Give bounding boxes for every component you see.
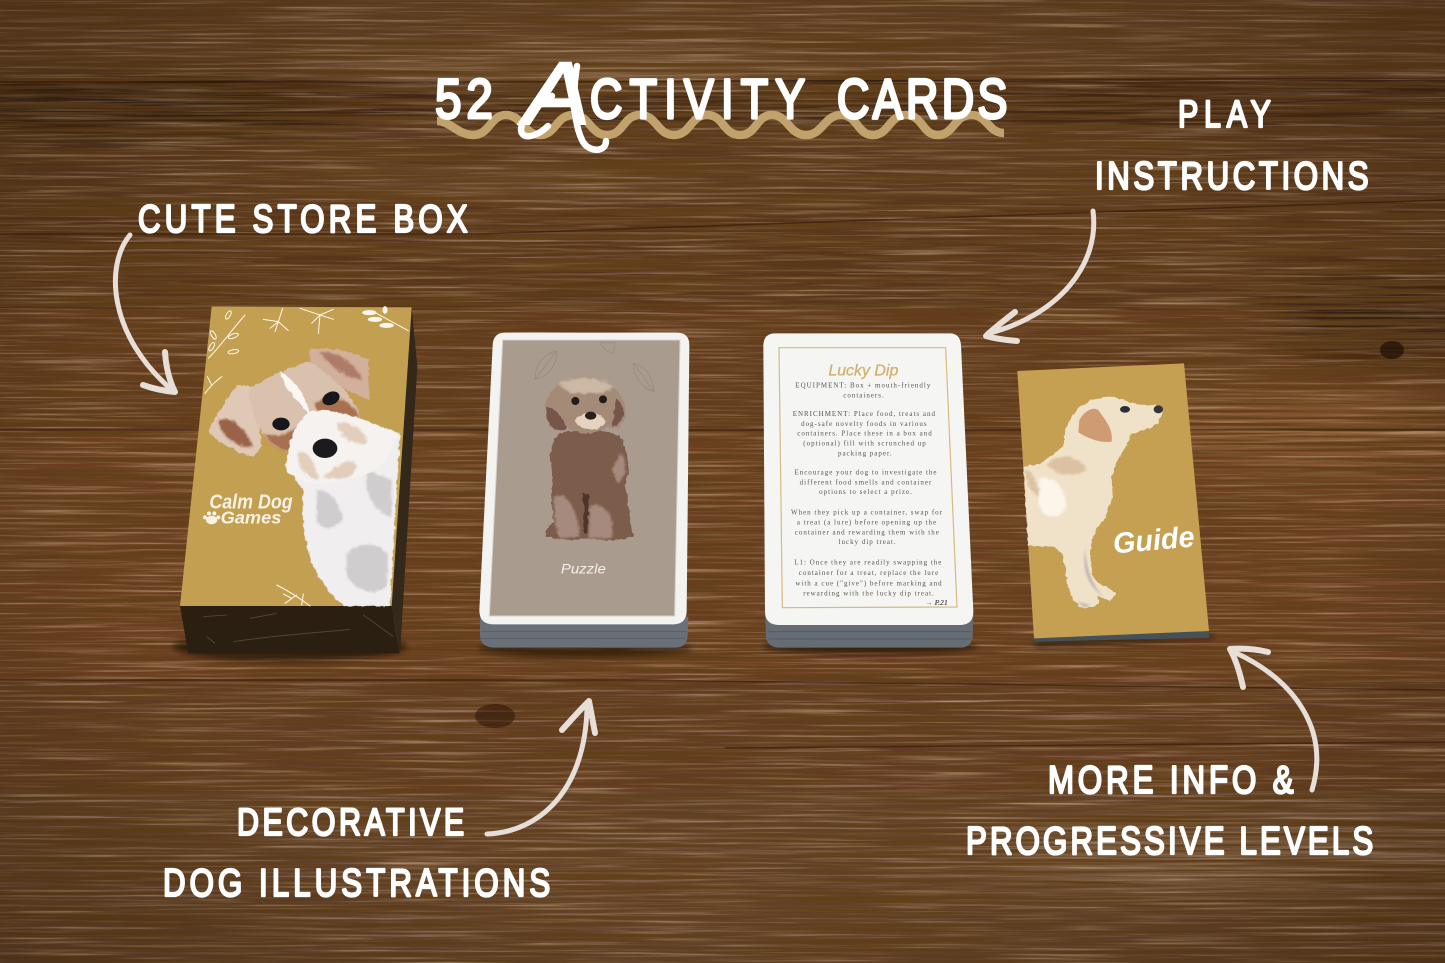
poodle illustration xyxy=(545,377,633,541)
card body text: container and rewarding them with the xyxy=(795,528,940,536)
label: decorative dog illustrations xyxy=(163,802,550,905)
label: play instructions: INSTRUCTIONS xyxy=(1095,155,1369,198)
title: 52 Activity Cards: CTIVITY xyxy=(590,67,805,130)
card face xyxy=(479,333,689,624)
card body text: containers. xyxy=(843,391,885,399)
card taupe panel xyxy=(489,340,680,616)
card body text: lucky dip treat. xyxy=(839,538,897,546)
card face xyxy=(763,333,973,625)
page reference: → P.21 xyxy=(925,598,948,607)
dog on box xyxy=(208,348,400,606)
card body text: ENRICHMENT: Place food, treats and xyxy=(793,410,936,418)
card body text: a treat (a lure) before opening up the xyxy=(797,518,937,526)
arrow: to dog card xyxy=(487,701,595,834)
label: decorative dog illustrations: DOG ILLUSTRATIONS xyxy=(163,862,550,905)
box bottom face xyxy=(180,606,399,653)
gold border xyxy=(779,348,957,608)
title wavy underline xyxy=(437,115,1004,135)
card body text: packing paper. xyxy=(838,449,893,457)
label: cute store box: CUTE STORE BOX xyxy=(138,198,468,241)
card deck: dog illustration side xyxy=(478,333,692,657)
card body text: Encourage your dog to investigate the xyxy=(794,469,938,477)
card caption: Puzzle: Puzzle xyxy=(561,560,606,576)
label: play instructions: PLAY xyxy=(1178,94,1271,136)
booklet cover xyxy=(1017,363,1209,638)
card body text: L1: Once they are readily swapping the xyxy=(794,559,942,567)
card body text: with a cue ("give") before marking and xyxy=(795,580,943,588)
card body text: (optional) fill with scrunched up xyxy=(803,439,927,447)
guide booklet xyxy=(1017,363,1215,648)
card body text: options to select a prize. xyxy=(819,488,913,496)
label: more info and progressive levels: MORE INFO & xyxy=(1048,759,1294,802)
booklet page edge xyxy=(1033,630,1209,642)
booklet title: Guide: Guide xyxy=(1112,520,1196,560)
box side face xyxy=(392,307,417,653)
card body text xyxy=(791,382,943,598)
label: more info and progressive levels xyxy=(966,759,1373,863)
box logo: Calm Dog Games: Games xyxy=(221,507,281,527)
box logo: Calm Dog Games xyxy=(203,490,293,527)
label: play instructions xyxy=(1095,94,1369,198)
card body text: different food smells and container xyxy=(800,478,932,486)
card body text: When they pick up a container, swap for xyxy=(791,508,943,516)
label: decorative dog illustrations: DECORATIVE xyxy=(237,802,464,844)
card stack edge xyxy=(480,617,688,648)
card body text: containers. Place these in a box and xyxy=(797,430,933,438)
arrow: to instructions card xyxy=(986,211,1094,341)
box logo: Calm Dog Games: Calm Dog xyxy=(209,490,293,513)
title: 52 Activity Cards xyxy=(435,44,1007,150)
label: more info and progressive levels: PROGRESSIVE LEVELS xyxy=(966,820,1373,863)
card body text: rewarding with the lucky dip treat. xyxy=(803,590,935,598)
store box xyxy=(173,307,417,662)
box front face xyxy=(180,307,412,606)
labrador illustration xyxy=(1023,397,1163,608)
dog facial features xyxy=(272,389,342,458)
card body text: container for a treat, replace the lure xyxy=(799,569,939,577)
leaves xyxy=(535,343,654,392)
title: 52 Activity Cards: A xyxy=(518,44,590,143)
arrow: to guide booklet xyxy=(1230,649,1317,790)
card stack edge xyxy=(765,615,973,648)
arrow: to store box xyxy=(115,235,175,392)
box floral decorations xyxy=(205,307,408,606)
card deck: instructions side xyxy=(763,333,977,655)
title: 52 Activity Cards: 52 xyxy=(435,68,493,131)
icon: paw print xyxy=(203,511,220,524)
title: 52 Activity Cards: CARDS xyxy=(837,67,1007,130)
card heading: Lucky Dip: Lucky Dip xyxy=(828,363,899,380)
bottom face floral pattern xyxy=(203,613,393,643)
card body text: dog-safe novelty foods in various xyxy=(801,420,928,428)
card body text: EQUIPMENT: Box + mouth-friendly xyxy=(795,382,931,390)
